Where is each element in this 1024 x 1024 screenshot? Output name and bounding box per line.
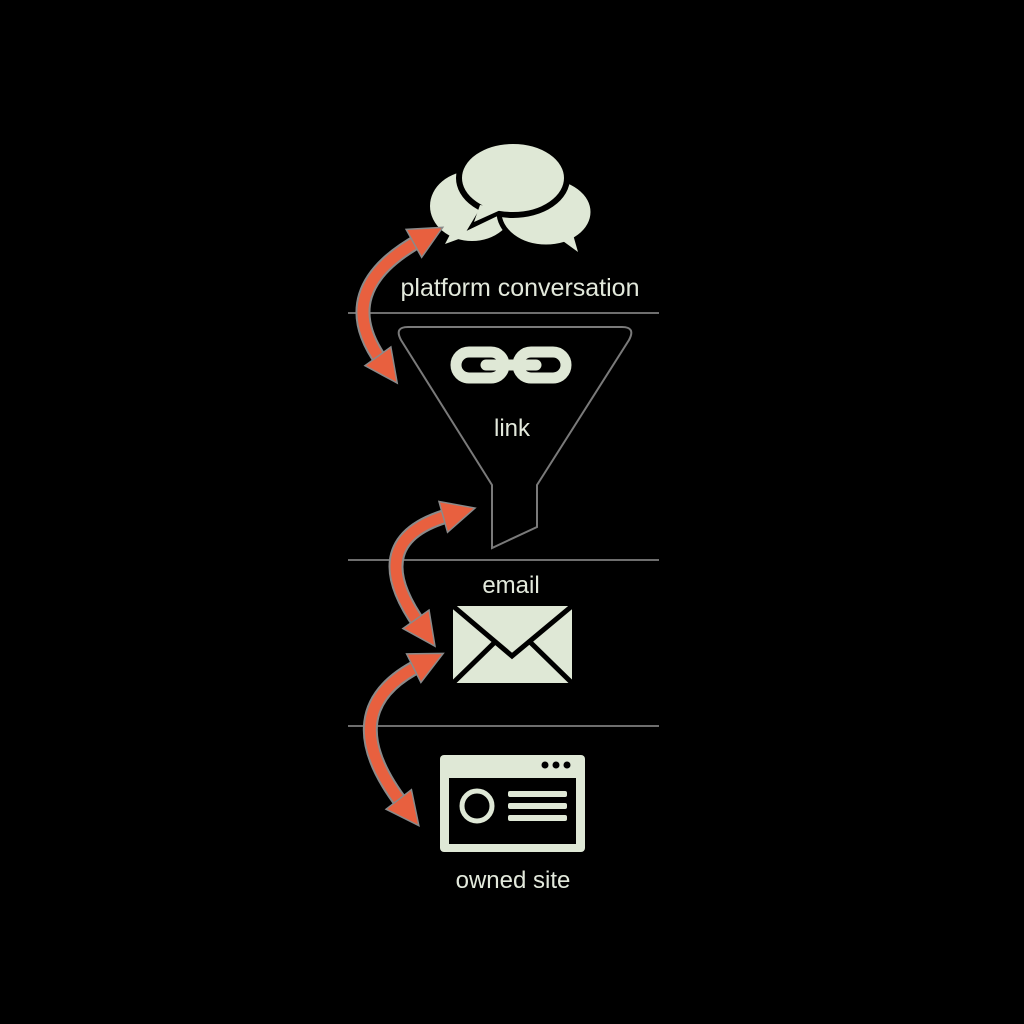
icon: browser window [440, 755, 585, 852]
arrow: link to email [396, 515, 450, 625]
label: link: link [494, 415, 531, 442]
label: email: email [482, 572, 540, 599]
label: owned site: owned site [456, 867, 570, 894]
label: platform conversation: platform conversation [400, 274, 640, 302]
icon: envelope [453, 606, 572, 683]
arrow: email to owned site [370, 665, 420, 805]
funnel [399, 327, 631, 548]
arrow: conversation to link [363, 240, 420, 362]
icon: chain link [456, 352, 566, 378]
icon: speech bubbles [430, 141, 593, 252]
